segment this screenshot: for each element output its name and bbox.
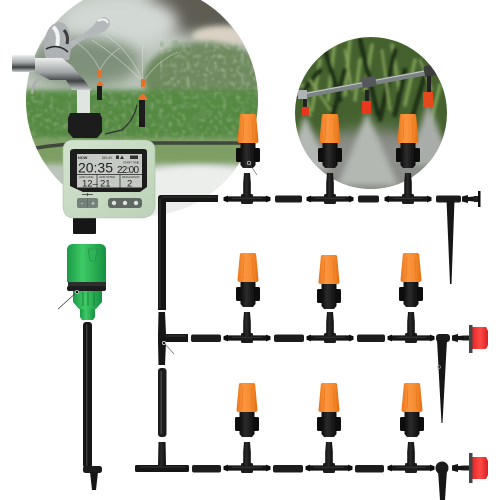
- tube segments: [191, 334, 385, 342]
- timer LCD: 22:00: [117, 165, 139, 176]
- timer LCD: 12–: [82, 178, 99, 190]
- timer body: [63, 140, 155, 218]
- callout pointer: [58, 292, 77, 309]
- timer LCD: HOW LONG: [79, 175, 93, 179]
- timer function buttons: [108, 198, 142, 208]
- bottom row drip line: [135, 383, 488, 500]
- tube segments: [192, 465, 384, 472]
- timer minus and plus buttons: -: [81, 200, 84, 208]
- nozzles: [236, 114, 420, 168]
- garden sprinkler stakes: [96, 70, 148, 134]
- timer LCD: 20:35: [78, 160, 113, 176]
- sprinkler spray arcs: [75, 35, 178, 82]
- tee connectors: [224, 173, 432, 204]
- photo: faucet and sprinklers in garden: [20, 0, 267, 225]
- stake and end plug: [436, 191, 480, 284]
- lower feed tube: [158, 368, 166, 437]
- timer LCD: NOW: [78, 156, 88, 160]
- timer LCD: DELAY: [102, 156, 113, 160]
- timer minus and plus buttons: +: [91, 200, 95, 208]
- supply tube from connector to stake: [83, 322, 102, 490]
- timer screen bezel: [70, 149, 147, 192]
- timer LCD: WHICH RIGHT: [122, 175, 140, 179]
- water timer: [63, 113, 155, 234]
- quick connector: green: [58, 244, 106, 320]
- main feed tube: upper elbow and vertical: [158, 195, 218, 310]
- cross tee on feed tube: [158, 312, 188, 365]
- timer LCD: 21: [100, 178, 111, 190]
- red end plug: [452, 325, 488, 353]
- nozzles: [236, 253, 423, 309]
- top row drip line: [224, 114, 480, 284]
- stake: [436, 462, 448, 500]
- stake: [436, 334, 450, 423]
- timer minus and plus buttons: [77, 193, 98, 208]
- timer LCD: 2: [127, 178, 132, 190]
- tee connectors: [224, 312, 434, 343]
- callout pointer: [247, 161, 257, 175]
- tube segments: [275, 196, 379, 202]
- timer LCD: HOW OFTEN: [99, 175, 115, 179]
- timer LCD: [77, 154, 142, 190]
- timer outlet thread: [73, 216, 96, 234]
- red misting heads: [302, 76, 433, 116]
- red end plug: [452, 453, 488, 483]
- timer LCD: START TIME: [123, 160, 139, 164]
- photo: misting nozzles over plants: [295, 37, 447, 189]
- faucet: [12, 17, 110, 113]
- timer hose nut: [68, 113, 102, 138]
- water stream: [77, 90, 90, 113]
- metal spray bar: [297, 63, 440, 99]
- timer brand label: WATER TIMER: [118, 148, 139, 152]
- middle row drip line: [158, 253, 488, 423]
- tee connectors: [224, 442, 434, 473]
- nozzles: [235, 383, 424, 437]
- end tee on feed tube: [135, 442, 189, 472]
